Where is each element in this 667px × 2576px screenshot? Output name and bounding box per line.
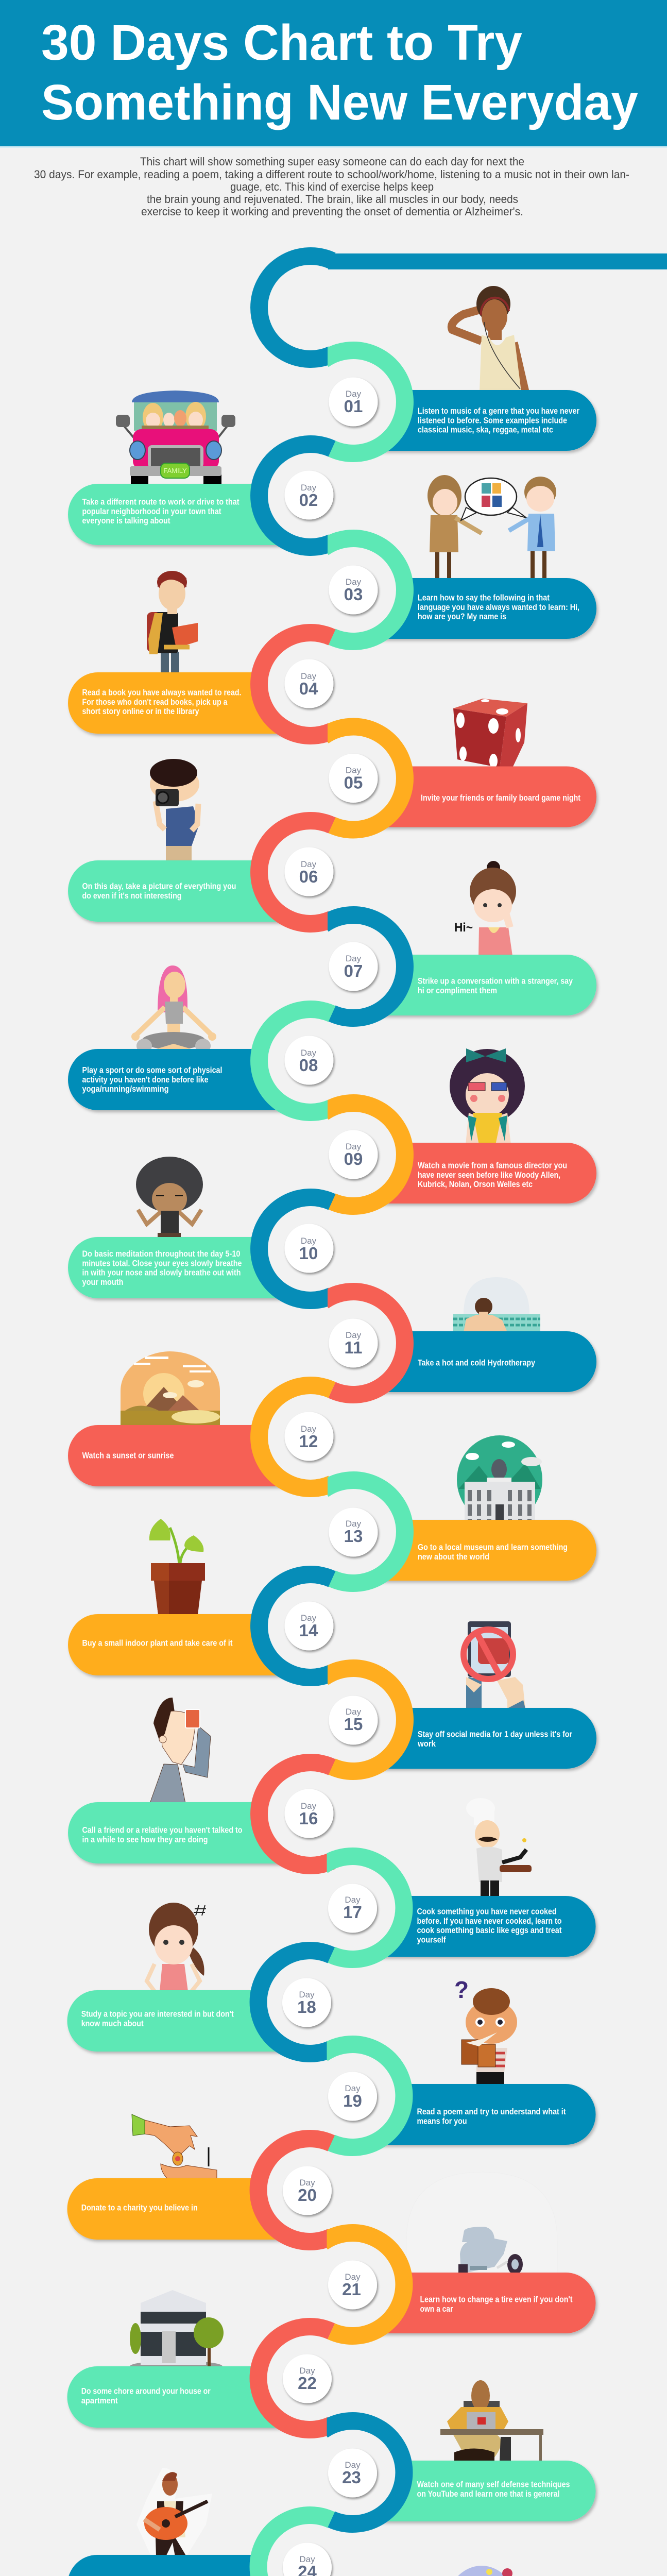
connector curve [323, 726, 405, 829]
badge: day 16 [284, 1789, 334, 1838]
illustration: marathon runner collage [443, 2566, 524, 2576]
hi label: Hi~ [454, 921, 473, 935]
step: day 01 [323, 350, 596, 453]
badge: day 11 [329, 1319, 378, 1367]
task text: minutes total. Close your eyes slowly breathe [82, 1259, 242, 1268]
bar: day 11 [369, 1331, 596, 1392]
illustration: car with a changed tire [406, 2172, 557, 2275]
task text: Learn how to change a tire even if you don't [420, 2295, 573, 2304]
task text [81, 2009, 234, 2028]
step: day 08 [68, 1009, 334, 1112]
task text: Take a hot and cold Hydrotherapy [418, 1358, 536, 1367]
task text: cook something basic like eggs and treat [417, 1926, 562, 1935]
task text: new about the world [418, 1552, 489, 1562]
illustration: person in hot tub [453, 1277, 540, 1332]
badge: day 09 [329, 1130, 378, 1179]
title [41, 14, 638, 130]
badge: day 22 [283, 2354, 332, 2403]
badge: day 24 [283, 2543, 332, 2576]
bar: day 06 [68, 860, 296, 922]
connector: start band and first curve [259, 253, 667, 359]
connector curve [322, 2421, 404, 2524]
badge: day 02: Day [301, 483, 317, 493]
badge: day 19 [328, 2072, 377, 2121]
illustration: man watching YouTube on a laptop [440, 2380, 543, 2462]
connector curve [323, 915, 405, 1018]
connector curve [322, 1856, 404, 1959]
bar: day 07 [369, 955, 596, 1015]
connector curve [259, 1762, 332, 1866]
badge: day 03 [329, 566, 378, 614]
task text [417, 1907, 562, 1944]
illustration: family in a pink jeep: FAMILY [163, 467, 187, 474]
badge: day 03: Day [346, 577, 362, 587]
bar: day 17 [369, 1896, 595, 1957]
intro text: the brain young and rejuvenated. The brain, like all muscles in our body, needs [147, 193, 518, 206]
intro text: 30 days. For example, reading a poem, taking a different route to school/work/home, listening to a music not in their own lan- [34, 168, 629, 181]
badge: day 22: 22 [298, 2374, 317, 2393]
step: day 09 [323, 1103, 596, 1206]
illustration: person with afro meditating [136, 1157, 203, 1238]
badge: day 15 [329, 1696, 378, 1744]
step: day 13 [323, 1480, 596, 1583]
illustration: girl with 3D glasses and popcorn [450, 1048, 525, 1145]
badge: day 14: 14 [299, 1621, 318, 1640]
badge: day 02: 02 [299, 490, 318, 510]
step: day 16 [68, 1762, 334, 1866]
step: day 22 [67, 2327, 332, 2430]
task text [418, 406, 579, 435]
badge: day 15: 15 [344, 1715, 363, 1734]
intro text: exercise to keep it working and preventing the onset of dementia or Alzheimer's. [141, 205, 523, 218]
badge: day 23: 23 [342, 2468, 361, 2487]
bar: day 22 [67, 2366, 296, 2428]
task text: On this day, take a picture of everything you [82, 882, 236, 891]
task text: classical music, ska, reggae, metal etc [418, 426, 553, 435]
connector curve [259, 1951, 331, 2054]
badge: day 08: Day [301, 1048, 317, 1058]
badge: day 19: Day [345, 2083, 361, 2093]
step: day 06 [68, 821, 334, 924]
task text: short story online or in the library [82, 707, 199, 716]
intro text: This chart will show something super easy someone can do each day for next the [140, 155, 524, 168]
task text: Invite your friends or family board game night [421, 793, 580, 803]
badge: day 22: Day [299, 2366, 315, 2376]
illustration: guitarist [136, 2468, 212, 2558]
step: day 18 [67, 1951, 331, 2054]
illustration: girl saying hi [454, 861, 516, 956]
illustration: man with headphones [452, 286, 525, 392]
connector curve [323, 1480, 405, 1583]
intro text: guage, etc. This kind of exercise helps keep [230, 180, 434, 193]
task text [82, 882, 236, 901]
illustration: potted plant [149, 1519, 205, 1615]
bar: day 12 [68, 1425, 296, 1486]
connector curve [323, 1103, 405, 1206]
task text: everyone is talking about [82, 516, 170, 526]
bar: day 19 [369, 2084, 595, 2145]
step: day 05 [323, 726, 596, 829]
step: day 20 [67, 2139, 332, 2242]
badge: day 17 [328, 1884, 377, 1933]
badge: day 20 [283, 2166, 332, 2215]
badge: day 01: Day [346, 389, 362, 399]
badge: day 12: Day [301, 1424, 317, 1434]
task text: do even if it's not interesting [82, 891, 181, 901]
illustration: red dice [453, 699, 527, 768]
task text [418, 594, 579, 621]
illustration: two people talking with puzzle speech bubble [427, 475, 556, 579]
task text: own a car [420, 2304, 453, 2314]
task text: Watch one of many self defense techniques [417, 2480, 570, 2489]
illustration: woman doing yoga [131, 965, 216, 1053]
badge: day 07: Day [346, 954, 362, 963]
badge: day 21: 21 [342, 2280, 361, 2299]
illustration: hands donating a coin [132, 2114, 217, 2179]
illustration: museum building [457, 1435, 542, 1524]
connector curve [259, 821, 332, 924]
badge: day 03: 03 [344, 585, 363, 604]
bar: day 02 [68, 484, 296, 545]
task text: Learn how to say the following in that [418, 594, 550, 603]
connector curve [259, 2139, 331, 2242]
task text: Do basic meditation throughout the day 5-10 [82, 1249, 240, 1259]
task text [82, 1826, 242, 1844]
badge: day 20: 20 [298, 2185, 317, 2205]
badge: day 13: 13 [344, 1527, 363, 1546]
step: day 10 [68, 1197, 334, 1300]
title: Something New Everyday [41, 74, 638, 130]
connector curve [259, 2515, 331, 2576]
task text: Watch a movie from a famous director you [418, 1161, 567, 1171]
badge: day 24: Day [299, 2554, 315, 2564]
task text: Strike up a conversation with a stranger, say [418, 977, 573, 986]
title: 30 Days Chart to Try [41, 14, 522, 71]
badge: day 06: Day [301, 859, 317, 869]
step: day 23 [322, 2421, 595, 2524]
task text [82, 1249, 242, 1287]
badge: day 07: 07 [344, 961, 363, 980]
badge: day 12 [284, 1412, 334, 1461]
illustration: boy reading a book [147, 571, 198, 673]
bar: day 04 [68, 672, 296, 734]
badge: day 15: Day [346, 1707, 362, 1717]
bar: day 24 [67, 2555, 296, 2576]
badge: day 20: Day [299, 2178, 315, 2188]
question mark: ? [454, 1976, 469, 2003]
bar: day 14 [68, 1614, 296, 1675]
connector curve [323, 1668, 405, 1771]
connector curve [322, 2233, 404, 2336]
task text [417, 2107, 566, 2126]
illustration: girl thinking [147, 1903, 206, 1991]
badge: day 12: 12 [299, 1432, 318, 1451]
badge: day 23: Day [345, 2460, 361, 2470]
task text [81, 2386, 211, 2405]
connector curve [259, 2327, 331, 2430]
task text [82, 498, 240, 526]
badge: day 04: 04 [299, 679, 318, 698]
task text [82, 688, 241, 716]
illustration: family in a pink jeep [116, 391, 235, 484]
connector curve [259, 1009, 332, 1112]
badge: day 07 [329, 942, 378, 991]
badge: day 06: 06 [299, 867, 318, 886]
task text [417, 1730, 572, 1749]
task text [420, 2295, 573, 2314]
header banner [0, 0, 667, 148]
task text: yoga/running/swimming [82, 1084, 169, 1094]
task text: work [417, 1739, 436, 1749]
step: day 14 [68, 1574, 334, 1677]
illustration: phone with no social media sign [464, 1621, 525, 1708]
step: day 21 [322, 2233, 595, 2336]
task text: apartment [81, 2396, 118, 2405]
task text: before. If you have never cooked, learn to [417, 1917, 561, 1926]
connector curve [259, 1385, 332, 1488]
illustration: man on a phone call [150, 1698, 211, 1803]
badge: day 01 [329, 377, 378, 427]
bar: day 16 [68, 1802, 296, 1863]
task text: have never seen before like Woody Allen, [418, 1171, 560, 1180]
task text: language you have always wanted to learn: Hi, [418, 603, 579, 612]
connector curve [323, 350, 405, 453]
step: day 12 [68, 1385, 334, 1488]
badge: day 10: 10 [299, 1244, 318, 1263]
badge: day 09: Day [346, 1142, 362, 1151]
bar: day 08 [68, 1049, 296, 1110]
task text: Stay off social media for 1 day unless it's for [418, 1730, 572, 1739]
task text: Cook something you have never cooked [417, 1907, 556, 1917]
badge: day 18 [282, 1978, 331, 2027]
badge: day 23 [328, 2448, 377, 2498]
task text: Study a topic you are interested in but don't [81, 2009, 234, 2019]
step: day 15 [323, 1668, 596, 1771]
task text: popular neighborhood in your town that [82, 507, 221, 516]
badge: day 19: 19 [343, 2091, 362, 2110]
bar: day 18 [67, 1990, 296, 2052]
task text: Read a poem and try to understand what it [417, 2107, 566, 2116]
task text: listened to before. Some examples include [418, 416, 567, 425]
badge: day 06 [284, 847, 334, 896]
badge: day 01: 01 [344, 397, 363, 416]
bar: day 20 [67, 2178, 296, 2240]
step: day 04 [68, 633, 334, 736]
bar: day 23 [369, 2461, 595, 2521]
step: day 11 [323, 1292, 596, 1395]
task text: For those who don't read books, pick up a [82, 698, 228, 707]
illustration: apartment building with trees [130, 2290, 224, 2372]
step: day 07 [323, 915, 596, 1018]
task text: Watch a sunset or sunrise [82, 1451, 174, 1460]
badge: day 05: Day [346, 766, 362, 775]
badge: day 04 [284, 659, 334, 708]
task text: Donate to a charity you believe in [81, 2203, 198, 2212]
step: day 02 [68, 444, 334, 547]
badge: day 18: 18 [297, 1997, 316, 2016]
badge: day 16: 16 [299, 1809, 318, 1828]
badge: day 14: Day [301, 1613, 317, 1623]
intro text [34, 155, 629, 218]
badge: day 17: 17 [343, 1903, 362, 1922]
bar: day 21 [369, 2273, 595, 2333]
task text: in a while to see how they are doing [82, 1835, 208, 1844]
badge: day 10: Day [301, 1236, 317, 1246]
step: day 03 [323, 538, 596, 641]
badge: day 05: 05 [344, 773, 363, 792]
bar: day 01 [369, 390, 596, 451]
task text [418, 1161, 567, 1189]
task text: Play a sport or do some sort of physical [82, 1065, 223, 1075]
bar: day 15 [369, 1708, 596, 1769]
badge: day 04: Day [301, 671, 317, 681]
badge: day 11: Day [346, 1330, 362, 1340]
step: day 17 [322, 1856, 595, 1959]
task text: how are you? My name is [418, 612, 506, 621]
bar: day 05 [369, 767, 596, 827]
task text [418, 977, 573, 995]
badge: day 10 [284, 1224, 334, 1273]
illustration: sunset over mountains [121, 1351, 220, 1426]
bar: day 09 [369, 1143, 596, 1204]
badge: day 13 [329, 1507, 378, 1557]
connector curve [259, 633, 332, 736]
task text [417, 2480, 570, 2499]
task text: hi or compliment them [418, 986, 497, 995]
connector curve [323, 1292, 405, 1395]
connector curve [322, 2044, 404, 2147]
task text: yourself [417, 1935, 446, 1944]
badge: day 21 [328, 2261, 377, 2309]
badge: day 02 [284, 471, 334, 519]
badge: day 16: Day [301, 1801, 317, 1811]
task text: Listen to music of a genre that you have never [418, 406, 579, 416]
illustration: photographer [150, 759, 199, 861]
task text: your mouth [82, 1278, 124, 1287]
badge: day 21: Day [345, 2272, 361, 2282]
illustration: chef with frying pan [466, 1798, 532, 1897]
connector curve [323, 538, 405, 641]
badge: day 05 [329, 754, 378, 803]
task text: in with your nose and slowly breathe out with [82, 1268, 241, 1278]
bar: day 10 [68, 1237, 296, 1298]
connector curve [259, 1197, 332, 1300]
step: day 19 [322, 2044, 595, 2147]
connector curve [259, 444, 332, 547]
badge: day 13: Day [346, 1519, 362, 1529]
badge: day 14 [284, 1601, 334, 1651]
task text: Take a different route to work or drive to that [82, 498, 240, 507]
bar: day 13 [369, 1520, 596, 1581]
task text: means for you [417, 2116, 467, 2126]
badge: day 11: 11 [345, 1338, 362, 1357]
badge: day 17: Day [345, 1895, 361, 1905]
badge: day 09: 09 [344, 1149, 363, 1168]
badge: day 08: 08 [299, 1056, 318, 1075]
connector curve [259, 1574, 332, 1677]
task text [82, 1065, 223, 1094]
task text [418, 1543, 568, 1562]
badge: day 18: Day [299, 1990, 315, 1999]
badge: day 08 [284, 1036, 334, 1085]
step: day 24 [67, 2515, 332, 2576]
task text: Kubrick, Nolan, Orson Welles etc [418, 1180, 533, 1189]
task text: Go to a local museum and learn something [418, 1543, 568, 1552]
task text: Buy a small indoor plant and take care of it [82, 1638, 233, 1648]
task text: Read a book you have always wanted to read. [82, 688, 241, 698]
task text: know much about [81, 2019, 144, 2028]
task text: Do some chore around your house or [81, 2386, 211, 2396]
task text: activity you haven't done before like [82, 1075, 208, 1084]
illustration: confused boy holding a book [454, 1976, 517, 2086]
bar: day 03 [369, 578, 596, 639]
task text: Call a friend or a relative you haven't talked to [82, 1826, 242, 1835]
task text: on YouTube and learn one that is general [417, 2489, 559, 2499]
